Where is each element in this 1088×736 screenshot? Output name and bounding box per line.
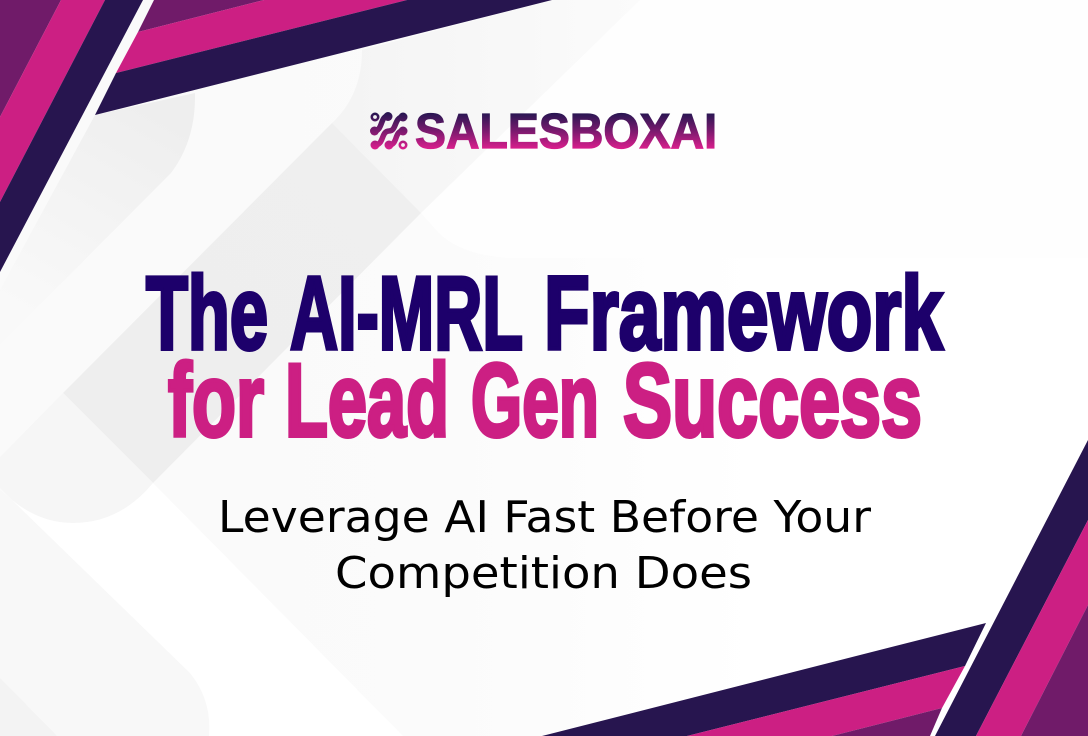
subtitle (218, 492, 872, 599)
icon: logo network mark (370, 112, 408, 150)
title line 2 (168, 343, 922, 459)
title line 1: AI-MRL (290, 256, 523, 372)
title line 1: The (146, 256, 268, 372)
subtitle line 1: Leverage AI Fast Before Your (218, 492, 872, 543)
right diagonal pink stripe (976, 520, 1088, 736)
left diagonal pink stripe (0, 0, 105, 202)
right diagonal purple stripe (1021, 605, 1088, 736)
bottom-right corner stripes (542, 440, 1088, 736)
title line 1: Framework (544, 256, 943, 372)
top purple stripe (138, 0, 264, 32)
title (146, 256, 943, 459)
bottom navy stripe (542, 623, 986, 736)
right diagonal navy stripe (935, 440, 1088, 736)
top pink stripe (116, 0, 407, 73)
bottom purple stripe (832, 708, 942, 736)
left diagonal purple stripe (0, 0, 61, 117)
bottom pink stripe (687, 666, 965, 736)
top-left corner stripes (0, 0, 552, 272)
left diagonal navy stripe (0, 0, 143, 272)
title line 1 (146, 256, 943, 372)
top navy stripe (95, 0, 552, 115)
logo wordmark: SALESBOXAI (415, 105, 717, 159)
subtitle line 2: Competition Does (335, 548, 752, 599)
logo (370, 105, 717, 159)
title line 2: Success (623, 343, 922, 459)
title line 2: Lead (285, 343, 449, 459)
title line 2: for (168, 343, 264, 459)
title line 2: Gen (471, 343, 599, 459)
